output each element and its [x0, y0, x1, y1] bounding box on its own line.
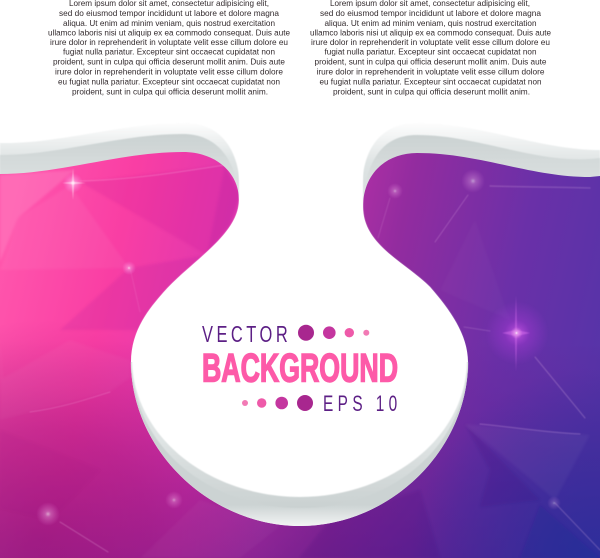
text block: right lorem ipsum column: ullamco laboris nisi ut aliquip ex ea commodo consequat. Duis aute [310, 28, 551, 38]
text block: right lorem ipsum column: irure dolor in reprehenderit in voluptate velit esse cillum dolore eu [311, 37, 550, 47]
sparkle: large violet flare [492, 300, 543, 367]
text block: right lorem ipsum column: proident, sunt in culpa qui officia deserunt mollit anim. [333, 86, 530, 96]
sparkle: upper left star [63, 169, 85, 198]
heading: VECTOR: VECTOR [202, 322, 291, 348]
polygon facets [0, 165, 600, 558]
text block: right lorem ipsum column [310, 0, 551, 96]
text block: left lorem ipsum column: proident, sunt in culpa qui officia deserunt mollit anim. [72, 86, 268, 96]
sparkle: lower centre [166, 492, 182, 508]
panel: white drop outer grey rim [131, 362, 468, 526]
sparkle: lower left [38, 504, 58, 524]
panel: top-right grey paper fold [362, 123, 600, 210]
text block: left lorem ipsum column: proident, sunt in culpa qui officia deserunt mollit anim. Duis aute [53, 57, 285, 67]
text block: right lorem ipsum column: irure dolor in reprehenderit in voluptate velit esse cillum dolore [316, 66, 545, 76]
text block: left lorem ipsum column: irure dolor in reprehenderit in voluptate velit esse cillum dolore [55, 66, 283, 76]
panel: pink to purple polygon background [0, 120, 600, 558]
panel: white drop mid shadow band [131, 362, 468, 508]
text block: right lorem ipsum column: proident, sunt in culpa qui officia deserunt mollit anim. Duis aute [314, 57, 547, 67]
text block: left lorem ipsum column [48, 0, 290, 96]
sparkle: mid left [123, 262, 135, 274]
text block: right lorem ipsum column: sed do eiusmod tempor incididunt ut labore et dolore magna [320, 8, 541, 18]
text block: left lorem ipsum column: fugiat nulla pariatur. Excepteur sint occaecat cupidatat non [63, 47, 275, 57]
label: EPS 10: EPS 10 [323, 392, 402, 417]
text block: right lorem ipsum column: eu fugiat nulla pariatur. Excepteur sint occaecat cupidatat non [320, 76, 542, 86]
text block: right lorem ipsum column: fugiat nulla pariatur. Excepteur sint occaecat cupidatat non [324, 47, 537, 57]
sparkle: purple medium [464, 171, 483, 191]
sparkle: lower right [548, 498, 560, 509]
heading: BACKGROUND: BACKGROUND [202, 346, 398, 390]
text block: left lorem ipsum column: ullamco laboris nisi ut aliquip ex ea commodo consequat. Duis aute [48, 28, 290, 38]
text block: left lorem ipsum column: eu fugiat nulla pariatur. Excepteur sint occaecat cupidatat non [58, 76, 280, 86]
light streaks [30, 165, 600, 552]
sparkle: purple small [388, 184, 402, 198]
text block: left lorem ipsum column: sed do eiusmod tempor incididunt ut labore et dolore magna [59, 8, 279, 18]
dots: row above headline [298, 325, 369, 341]
text block: left lorem ipsum column: aliqua. Ut enim ad minim veniam, quis nostrud exercitation [63, 18, 275, 28]
text block: left lorem ipsum column: irure dolor in reprehenderit in voluptate velit esse cillum dolore eu [50, 37, 288, 47]
text block: right lorem ipsum column: aliqua. Ut enim ad minim veniam, quis nostrud exercitation [324, 18, 537, 28]
panel: white drop main shape [132, 150, 467, 497]
dots: row below headline [242, 395, 313, 411]
panel: top-left grey paper fold [0, 123, 240, 205]
